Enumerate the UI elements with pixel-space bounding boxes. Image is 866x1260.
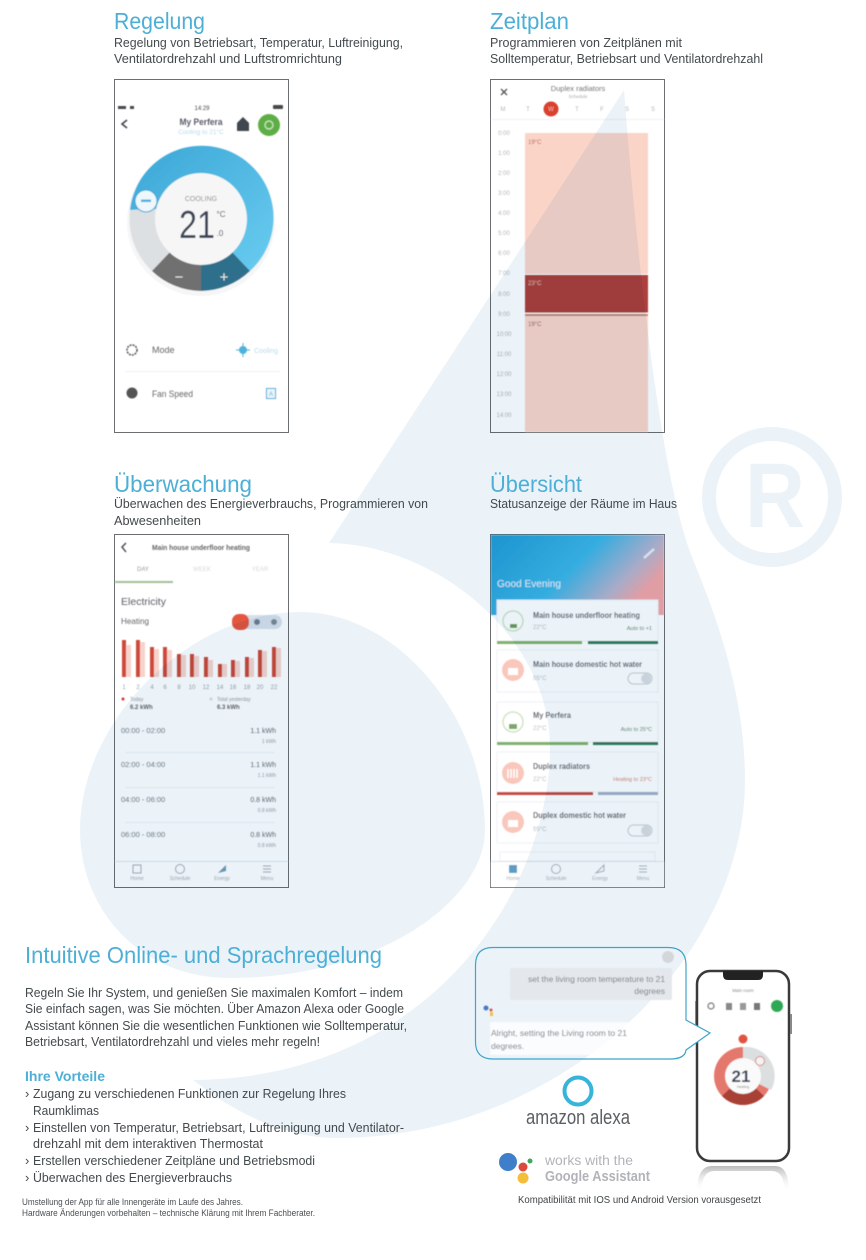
electricity heading: Electricity bbox=[121, 596, 167, 608]
electricity heading bbox=[121, 596, 282, 630]
gradient header bbox=[491, 535, 664, 615]
weekday selector: S bbox=[651, 107, 655, 113]
hour labels bbox=[496, 131, 512, 419]
benefits list: Erstellen verschiedener Zeitpläne und Betriebsmodi bbox=[33, 1153, 315, 1168]
room card: My Perfera: Auto to 25°C bbox=[621, 727, 652, 733]
bottom tab bar bbox=[115, 861, 288, 882]
bottom tab bar: Schedule bbox=[170, 876, 191, 882]
phone thermostat dial: Heating bbox=[737, 1085, 749, 1089]
intro paragraph bbox=[25, 985, 407, 1049]
weekday selector: S bbox=[625, 107, 629, 113]
weekday selector: F bbox=[600, 107, 604, 113]
room card: My Perfera bbox=[497, 702, 658, 745]
panel: rooms overview app screen bbox=[490, 534, 664, 888]
monitoring header and tabs: YEAR bbox=[252, 567, 269, 573]
section: Übersicht: Statusanzeige der Räume im Haus bbox=[490, 496, 677, 511]
room card: Duplex domestic hot water bbox=[497, 802, 658, 843]
intro paragraph: Sie einfach sagen, was Sie möchten. Über Amazon Alexa oder Google bbox=[25, 1001, 404, 1016]
section: Übersicht: Übersicht bbox=[490, 471, 583, 497]
phone screen header: Main room bbox=[732, 988, 754, 993]
room card: main house domestic hot water: Main house domestic hot water bbox=[533, 660, 642, 669]
bottom tab bar: Schedule bbox=[546, 876, 567, 882]
logo: works with the Google Assistant: Google Assistant bbox=[545, 1169, 650, 1185]
hour labels: 5:00 bbox=[498, 231, 510, 237]
smartphone mockup bbox=[695, 971, 792, 1192]
bar chart: hourly energy: 10 bbox=[189, 685, 196, 691]
mode row: Mode bbox=[152, 345, 175, 355]
app header: My Perfera bbox=[180, 117, 223, 127]
benefits list: Raumklimas bbox=[33, 1103, 99, 1118]
speech bubble: voice conversation bbox=[476, 948, 710, 1059]
chart legend: 6.2 kWh bbox=[130, 705, 153, 711]
thermostat dial: °C bbox=[217, 210, 226, 219]
hour labels: 1:00 bbox=[498, 151, 510, 157]
hour labels: 6:00 bbox=[498, 251, 510, 257]
room card: Duplex radiators: Duplex radiators bbox=[533, 762, 590, 771]
hour labels: 12:00 bbox=[496, 372, 512, 378]
hour labels: 11:00 bbox=[497, 352, 512, 358]
hourly consumption rows: 1.1 kWh bbox=[250, 728, 276, 735]
hour labels: 3:00 bbox=[498, 191, 510, 197]
schedule blocks bbox=[525, 133, 648, 432]
bottom tab bar: Energy bbox=[592, 876, 608, 882]
schedule blocks: 19°C bbox=[528, 322, 542, 328]
hour labels: 8:00 bbox=[498, 292, 510, 298]
section: Regelung: Ventilatordrehzahl und Luftstromrichtung bbox=[114, 51, 342, 66]
hourly consumption rows: 04:00 - 06:00 bbox=[121, 795, 165, 804]
bar chart: hourly energy: 18 bbox=[244, 685, 251, 691]
chart legend bbox=[122, 697, 251, 711]
main title: Intuitive Online- und Sprachregelung bbox=[25, 942, 382, 968]
hour labels: 0:00 bbox=[498, 131, 510, 137]
mode row bbox=[127, 343, 278, 357]
room card: Duplex radiators: 22°C bbox=[533, 777, 547, 783]
bottom tab bar: Energy bbox=[214, 876, 230, 882]
monitoring header and tabs: DAY bbox=[137, 567, 149, 573]
benefits list: Ihre Vorteile bbox=[25, 1068, 105, 1084]
section: Regelung: Regelung von Betriebsart, Temperatur, Luftreinigung, bbox=[114, 35, 403, 50]
room card: main house domestic hot water bbox=[497, 650, 658, 692]
bottom tab bar: Home bbox=[506, 876, 520, 882]
hour labels: 14:00 bbox=[496, 413, 512, 419]
gradient header: Good Evening bbox=[497, 578, 561, 590]
weekday selector bbox=[491, 102, 664, 120]
room card: main house domestic hot water: 55°C bbox=[533, 676, 547, 682]
status bar bbox=[118, 105, 283, 112]
benefits list: › bbox=[25, 1086, 29, 1101]
weekday selector: T bbox=[526, 107, 530, 113]
background: registered trademark symbol bbox=[709, 434, 835, 560]
room card: Duplex radiators bbox=[497, 752, 658, 795]
background: water drop watermark bbox=[80, 90, 745, 1138]
assistant message: Alright, setting the Living room to 21 bbox=[491, 1028, 627, 1038]
fan speed row: A bbox=[269, 392, 273, 398]
hourly consumption rows: 1 kWh bbox=[262, 739, 276, 745]
hourly consumption rows bbox=[121, 726, 276, 849]
benefits list: Einstellen von Temperatur, Betriebsart, Luftreinigung und Ventilator- bbox=[33, 1120, 404, 1135]
hourly consumption rows: 0.8 kWh bbox=[250, 832, 276, 839]
schedule header: Schedule bbox=[569, 94, 588, 99]
benefits list: › bbox=[25, 1170, 29, 1185]
bar chart: hourly energy: 16 bbox=[230, 685, 237, 691]
logo: amazon alexa: amazon alexa bbox=[526, 1107, 631, 1129]
hourly consumption rows: 1.1 kWh bbox=[250, 762, 276, 769]
bar chart: hourly energy bbox=[122, 640, 281, 691]
user message: degrees bbox=[634, 986, 665, 996]
user message: set the living room temperature to 21 bbox=[528, 974, 665, 984]
phone thermostat dial bbox=[714, 1034, 775, 1105]
section: Überwachung: Überwachen des Energieverbrauchs, Programmieren von bbox=[114, 496, 428, 511]
section: Übersicht bbox=[490, 471, 677, 511]
app header: Cooling to 21°C bbox=[178, 128, 224, 136]
thermostat dial: 21 bbox=[179, 204, 215, 247]
logo: works with the Google Assistant: works with the bbox=[544, 1152, 633, 1168]
electricity heading: Heating bbox=[121, 616, 149, 626]
room card: main house underfloor heating: Auto to +1 bbox=[627, 626, 652, 632]
hourly consumption rows: 0.8 kWh bbox=[258, 808, 276, 814]
schedule blocks: 23°C bbox=[528, 281, 542, 287]
section: Zeitplan bbox=[490, 8, 763, 66]
hour labels: 2:00 bbox=[498, 171, 510, 177]
hourly consumption rows: 1.1 kWh bbox=[258, 773, 276, 779]
hour labels: 13:00 bbox=[496, 392, 512, 398]
benefits list: Zugang zu verschiedenen Funktionen zur Regelung Ihres bbox=[33, 1086, 346, 1101]
schedule header bbox=[501, 84, 606, 99]
bar chart: hourly energy: 4 bbox=[150, 685, 154, 691]
assistant message bbox=[490, 1022, 648, 1055]
fan speed row: Fan Speed bbox=[152, 389, 193, 399]
chart legend: Total yesterday bbox=[217, 697, 251, 703]
weekday selector: M bbox=[500, 107, 506, 113]
bar chart: hourly energy: 2 bbox=[136, 685, 140, 691]
assistant icon bbox=[484, 1006, 493, 1016]
benefits list: drehzahl mit dem interaktiven Thermostat bbox=[33, 1136, 263, 1151]
logo: works with the Google Assistant bbox=[499, 1152, 650, 1185]
bottom tab bar: Menu bbox=[261, 876, 273, 882]
room card: Duplex domestic hot water: Duplex domestic hot water bbox=[533, 811, 626, 820]
compatibility note: Kompatibilität mit IOS und Android Version vorausgesetzt bbox=[518, 1195, 761, 1206]
chart legend: Today bbox=[130, 697, 144, 703]
intro paragraph: Regeln Sie Ihr System, und genießen Sie maximalen Komfort – indem bbox=[25, 985, 403, 1000]
section: Überwachung bbox=[114, 471, 428, 528]
monitoring header and tabs bbox=[115, 543, 269, 583]
hourly consumption rows: 06:00 - 08:00 bbox=[121, 830, 165, 839]
chart legend: 6.3 kWh bbox=[217, 705, 240, 711]
bar chart: hourly energy: 14 bbox=[217, 685, 224, 691]
background: registered trademark symbol: R bbox=[745, 445, 805, 547]
schedule blocks: 19°C bbox=[528, 140, 542, 146]
room card: My Perfera: My Perfera bbox=[533, 711, 572, 720]
hour labels: 10:00 bbox=[496, 332, 512, 338]
bar chart: hourly energy: 12 bbox=[203, 685, 210, 691]
benefits list: › bbox=[25, 1120, 29, 1135]
bottom tab bar bbox=[491, 861, 664, 887]
hourly consumption rows: 00:00 - 02:00 bbox=[121, 726, 165, 735]
hourly consumption rows: 0.8 kWh bbox=[258, 843, 276, 849]
weekday selector: W bbox=[548, 107, 554, 113]
phone reflection bbox=[697, 1166, 789, 1192]
assistant message: degrees. bbox=[491, 1041, 524, 1051]
monitoring header and tabs: Main house underfloor heating bbox=[152, 543, 250, 552]
bar chart: hourly energy: 6 bbox=[163, 685, 167, 691]
section: Zeitplan: Solltemperatur, Betriebsart und Ventilatordrehzahl bbox=[490, 51, 763, 66]
bar chart: hourly energy: 8 bbox=[177, 685, 181, 691]
section: Überwachung: Abwesenheiten bbox=[114, 513, 201, 528]
hour labels: 9:00 bbox=[498, 312, 510, 318]
section: Zeitplan: Programmieren von Zeitplänen mit bbox=[490, 35, 682, 50]
intro paragraph: Assistant können Sie die wesentlichen Funktionen wie Solltemperatur, bbox=[25, 1018, 407, 1033]
room card: Duplex radiators: Heating to 23°C bbox=[613, 777, 652, 783]
thermostat dial bbox=[127, 146, 275, 296]
bottom tab bar: Menu bbox=[637, 876, 649, 882]
footnote bbox=[22, 1197, 315, 1218]
section: Zeitplan: Zeitplan bbox=[490, 8, 569, 34]
room card: main house underfloor heating: 22°C bbox=[533, 625, 547, 631]
thermostat dial: + bbox=[220, 269, 229, 286]
section: Regelung bbox=[114, 8, 403, 66]
panel: schedule app screen bbox=[490, 80, 664, 432]
benefits list: › bbox=[25, 1153, 29, 1168]
room card: Duplex domestic hot water: 55°C bbox=[533, 827, 547, 833]
hourly consumption rows: 02:00 - 04:00 bbox=[121, 760, 165, 769]
user avatar bbox=[662, 951, 674, 963]
thermostat dial: COOLING bbox=[185, 196, 217, 203]
panel: energy monitoring app screen bbox=[114, 534, 288, 888]
hour labels: 7:00 bbox=[498, 271, 510, 277]
bar chart: hourly energy: 1 bbox=[122, 685, 126, 691]
phone thermostat dial: 21 bbox=[732, 1067, 750, 1086]
footnote: Hardware Änderungen vorbehalten – technische Klärung mit Ihrem Fachberater. bbox=[22, 1208, 315, 1218]
monitoring header and tabs: WEEK bbox=[193, 567, 211, 573]
schedule header: Duplex radiators bbox=[551, 84, 606, 93]
bar chart: hourly energy: 22 bbox=[271, 685, 278, 691]
hourly consumption rows: 0.8 kWh bbox=[250, 797, 276, 804]
fan speed row bbox=[126, 388, 276, 399]
status bar: 14:29 bbox=[194, 106, 210, 112]
bar chart: hourly energy: 20 bbox=[257, 685, 264, 691]
weekday selector: T bbox=[575, 107, 579, 113]
panel: thermostat app screen bbox=[114, 80, 288, 432]
room card: main house underfloor heating bbox=[497, 600, 658, 644]
section: Regelung: Regelung bbox=[114, 8, 205, 34]
room card: main house underfloor heating: Main house underfloor heating bbox=[533, 611, 640, 620]
user message bbox=[510, 968, 672, 1000]
section: Überwachung: Überwachung bbox=[114, 471, 252, 497]
bottom tab bar: Home bbox=[130, 876, 144, 882]
thermostat dial: .0 bbox=[217, 229, 224, 238]
mode row: Cooling bbox=[254, 348, 278, 355]
app header bbox=[122, 114, 280, 136]
benefits list bbox=[25, 1068, 404, 1185]
hour labels: 4:00 bbox=[498, 211, 510, 217]
intro paragraph: Betriebsart, Ventilatordrehzahl und vieles mehr regeln! bbox=[25, 1034, 320, 1049]
footnote: Umstellung der App für alle Innengeräte im Laufe des Jahres. bbox=[22, 1197, 243, 1207]
room card: My Perfera: 22°C bbox=[533, 726, 547, 732]
benefits list: Überwachen des Energieverbrauchs bbox=[33, 1170, 232, 1185]
logo: amazon alexa bbox=[526, 1078, 631, 1129]
thermostat dial: − bbox=[175, 269, 184, 286]
